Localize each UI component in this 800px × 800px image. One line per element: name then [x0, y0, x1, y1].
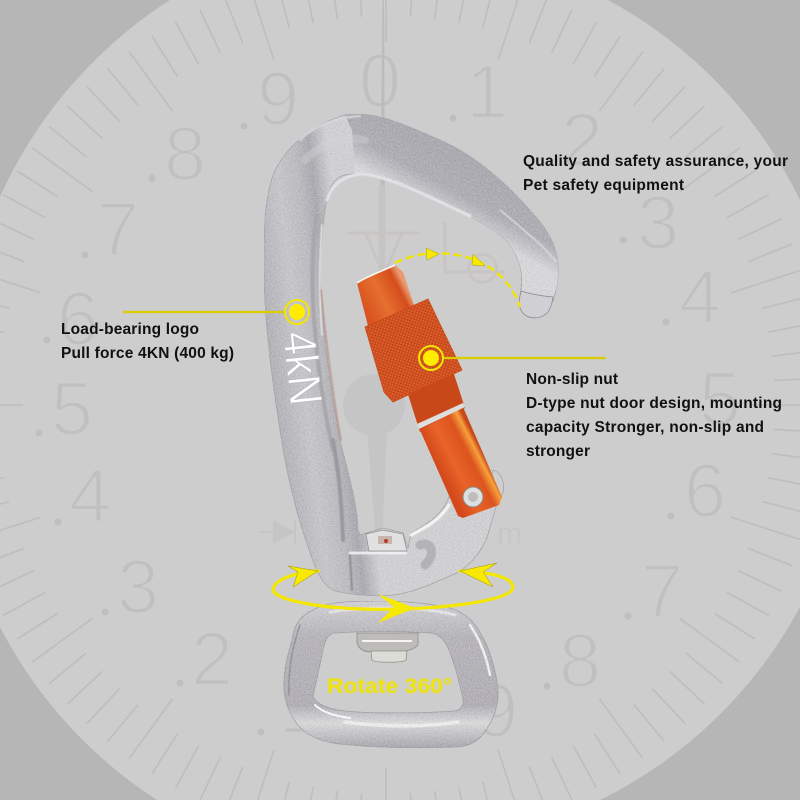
dial numbers: 3: [117, 545, 159, 630]
swivel ring: [284, 601, 498, 748]
dial numbers: 7: [97, 187, 139, 272]
rotation arrow: [273, 563, 513, 623]
swivel bolt: [357, 633, 418, 662]
dial unit: m: [497, 517, 522, 550]
text block: quality: Quality and safety assurance, your: [523, 153, 788, 170]
text block: non-slip nut: Non-slip nut: [526, 371, 618, 388]
dashed gate swing arrow: [395, 248, 520, 307]
knurled nut: [365, 299, 462, 402]
text block: quality: [523, 153, 788, 194]
dial numbers: 5: [51, 367, 93, 452]
carabiner body: [264, 114, 558, 596]
4kN logo: 4kN: [273, 329, 333, 408]
dial numbers: 2: [561, 98, 603, 183]
dial numbers: 6: [57, 277, 99, 362]
neck ring: [417, 403, 465, 429]
text block: load-bearing logo: Load-bearing logo: [61, 321, 199, 338]
dial numbers: 4: [69, 454, 111, 539]
dial numbers: 1: [279, 665, 321, 750]
hinge knob: [490, 470, 504, 500]
hook tip: [519, 291, 553, 318]
ring highlights: [289, 608, 490, 726]
dial numbers: 6: [684, 449, 726, 534]
rotate label: Rotate 360°: [327, 675, 452, 698]
text block: load-bearing logo: Pull force 4KN (400 kg): [61, 345, 234, 362]
dial numbers: 5: [699, 357, 741, 442]
dial numbers: 2: [191, 617, 233, 702]
callout: nut marker: [419, 346, 606, 370]
dial needle and hub: [260, 0, 405, 544]
text block: non-slip nut: [526, 371, 782, 460]
dial numbers: 8: [164, 112, 206, 197]
lower tube: [420, 407, 502, 518]
text block: quality: Pet safety equipment: [523, 177, 684, 194]
text block: load-bearing logo: [61, 321, 234, 362]
dial numbers: 7: [641, 549, 683, 634]
dial numbers: 9: [476, 669, 518, 754]
orange screw gate: [357, 265, 504, 518]
dial numbers: 8: [559, 619, 601, 704]
dial decimal dots: [36, 114, 674, 736]
dial emblem: [347, 215, 505, 282]
callout: load-bearing marker: [123, 300, 309, 324]
pin: [463, 487, 483, 507]
dial numbers: 9: [257, 57, 299, 142]
dial numbers: 1: [466, 50, 508, 135]
dial numbers: [51, 39, 741, 754]
curved top section: [345, 114, 558, 298]
cylinder rim: [357, 265, 395, 283]
neck: [405, 368, 465, 432]
text block: non-slip nut: stronger: [526, 443, 590, 460]
top cylinder: [357, 265, 414, 326]
dial numbers: 3: [637, 181, 679, 266]
dial numbers: 0: [359, 39, 401, 124]
dial numbers: 4: [679, 255, 721, 340]
text block: non-slip nut: D-type nut door design, mounting: [526, 395, 782, 412]
hub bolt: [366, 530, 407, 551]
text block: non-slip nut: capacity Stronger, non-slip and: [526, 419, 764, 436]
metal highlights: [300, 116, 556, 590]
